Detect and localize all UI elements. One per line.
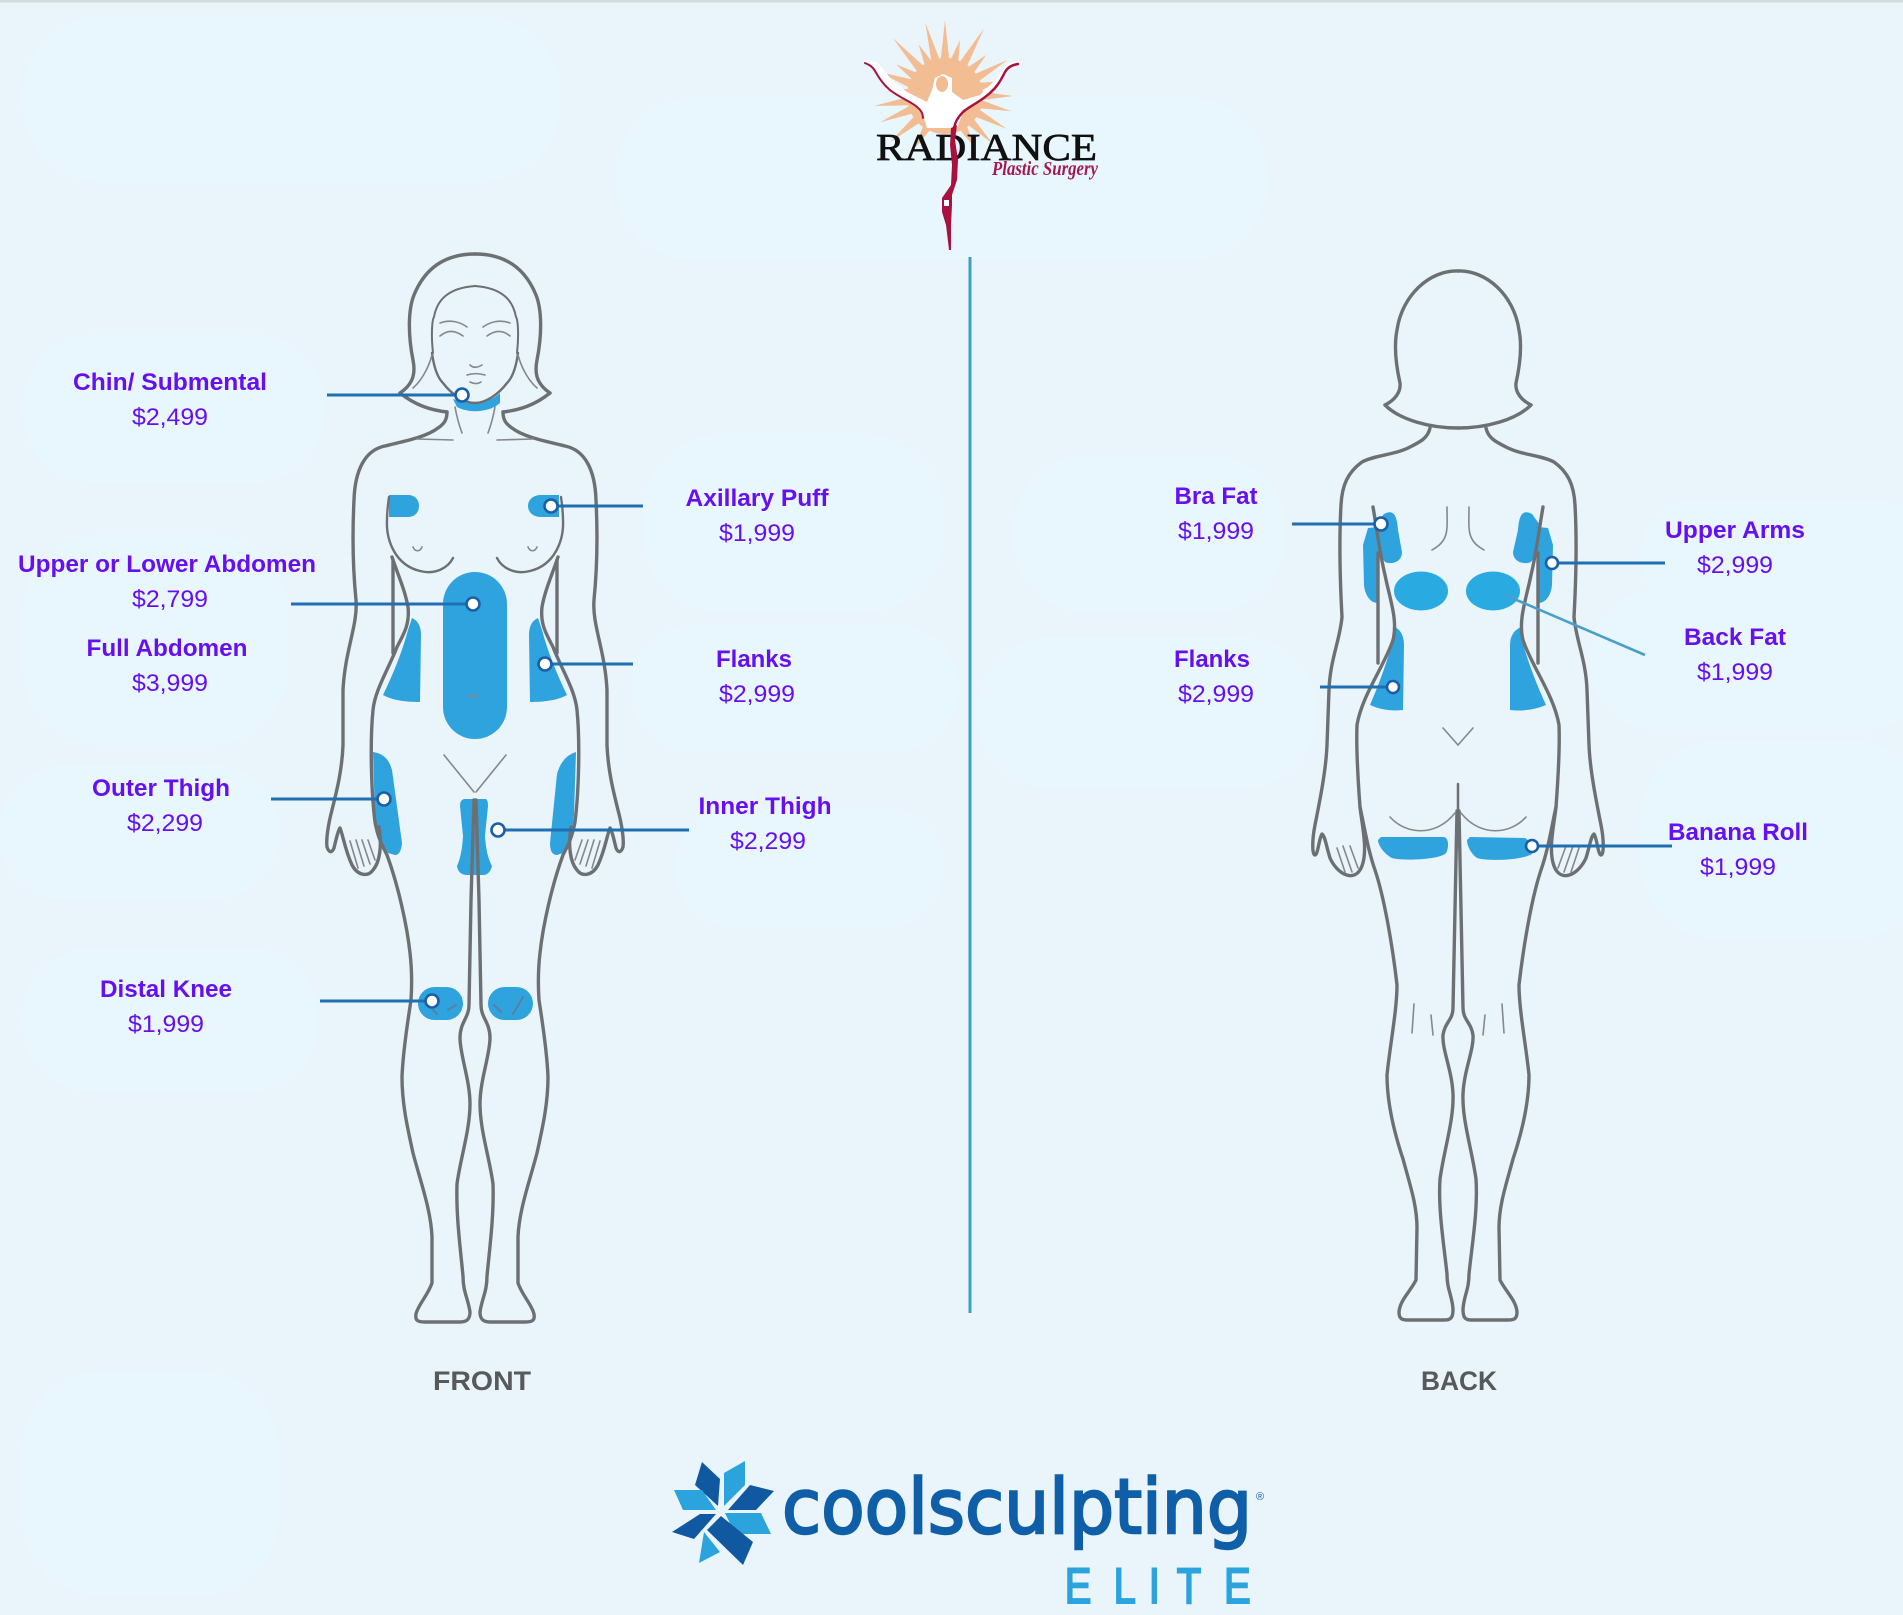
logo wordmark: RADIANCE — [876, 127, 1097, 169]
label: Upper Arms: $2,999 — [1697, 552, 1773, 579]
caption: BACK: BACK — [1421, 1366, 1497, 1396]
logo tagline: Plastic Surgery — [991, 159, 1098, 180]
label: Upper or Lower Abdomen: $2,799 — [132, 586, 208, 613]
label: Full Abdomen: Full Abdomen — [86, 635, 248, 662]
label: Chin/ Submental: $2,499 — [132, 404, 208, 431]
label: Bra Fat — [1174, 483, 1258, 545]
label: Axillary Puff — [686, 485, 829, 547]
label: Banana Roll: Banana Roll — [1668, 819, 1808, 846]
caption: FRONT: FRONT — [433, 1366, 532, 1396]
logo sunburst — [873, 20, 1013, 150]
label: Bra Fat: $1,999 — [1178, 518, 1254, 545]
icon: coolsculpting star — [672, 1461, 774, 1565]
logo: coolsculpting elite — [672, 1461, 1264, 1614]
logo figure outline — [865, 63, 1018, 250]
label: Banana Roll — [1668, 819, 1808, 881]
label: Full Abdomen — [86, 635, 248, 697]
label: Flanks front: $2,999 — [719, 681, 795, 708]
label: Full Abdomen: $3,999 — [132, 670, 208, 697]
logo figure body — [863, 61, 1020, 128]
label: Distal Knee: $1,999 — [128, 1011, 204, 1038]
back treatment areas — [1363, 512, 1553, 860]
front knee creases — [433, 997, 523, 1014]
label: Inner Thigh — [698, 793, 832, 855]
logo figure face — [936, 76, 948, 92]
logo: Radiance Plastic Surgery — [863, 20, 1098, 250]
label: Flanks front: Flanks — [716, 646, 792, 673]
label: Back Fat — [1684, 624, 1786, 686]
label: Flanks front — [716, 646, 795, 708]
front body outline, left half — [327, 254, 485, 1322]
label: Upper Arms — [1665, 517, 1805, 579]
front callout lines and dots — [271, 388, 689, 1008]
label: Chin/ Submental: Chin/ Submental — [73, 369, 267, 396]
label: Back Fat: Back Fat — [1684, 624, 1786, 651]
wordmark: ELITE: ELITE — [1065, 1558, 1251, 1614]
front treatment areas — [373, 393, 576, 1020]
label: Bra Fat: Bra Fat — [1174, 483, 1258, 510]
label: Outer Thigh: Outer Thigh — [92, 775, 230, 802]
label: Axillary Puff: $1,999 — [719, 520, 795, 547]
label: Distal Knee: Distal Knee — [100, 976, 232, 1003]
label: Banana Roll: $1,999 — [1700, 854, 1776, 881]
wordmark: coolsculpting: coolsculpting — [782, 1462, 1252, 1551]
label: Back Fat: $1,999 — [1697, 659, 1773, 686]
label: Axillary Puff: Axillary Puff — [686, 485, 829, 512]
label: Upper Arms: Upper Arms — [1665, 517, 1805, 544]
label: Inner Thigh: Inner Thigh — [698, 793, 832, 820]
label: Distal Knee — [100, 976, 232, 1038]
back callout lines and dots — [1292, 518, 1672, 852]
label: Upper or Lower Abdomen — [18, 551, 316, 613]
back body outline, left half — [1313, 271, 1458, 1320]
figure: front view — [271, 254, 689, 1322]
label: Flanks back: Flanks — [1174, 646, 1250, 673]
figure: back view — [1292, 271, 1672, 1320]
label: Chin/ Submental — [73, 369, 267, 431]
divider — [968, 257, 972, 1313]
label: Flanks back: $2,999 — [1178, 681, 1254, 708]
registered mark: ® — [1256, 1491, 1264, 1503]
label: Upper or Lower Abdomen: Upper or Lower Abdomen — [18, 551, 316, 578]
label: Outer Thigh: $2,299 — [127, 810, 203, 837]
label: Inner Thigh: $2,299 — [730, 828, 806, 855]
label: Flanks back — [1174, 646, 1254, 708]
label: Outer Thigh — [92, 775, 230, 837]
back body outline, right half — [1458, 271, 1603, 1320]
front body outline, right half — [475, 254, 623, 1322]
